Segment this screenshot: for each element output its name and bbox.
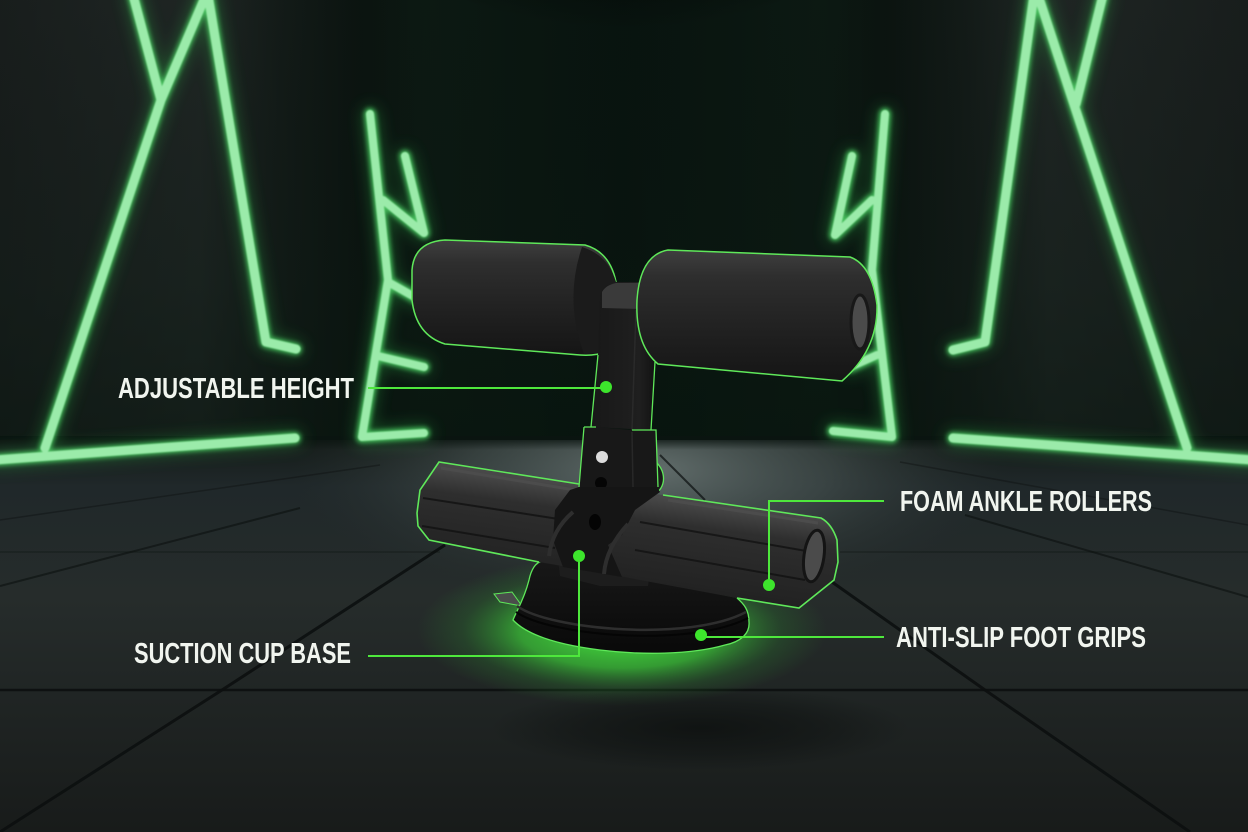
upright post: [591, 282, 660, 430]
rear knob: [650, 458, 664, 494]
callout: anti-slip foot grips: [695, 622, 1146, 654]
upper left pad: [412, 240, 616, 355]
neon wall lines: left: [0, 0, 424, 460]
callout: adjustable height: ADJUSTABLE HEIGHT: [118, 373, 354, 405]
base collar: [558, 560, 650, 586]
callout: suction cup base: [134, 550, 585, 670]
suction cup base: [494, 560, 749, 653]
callout: adjustable height: [118, 373, 612, 405]
floor glow under product: [417, 554, 827, 706]
callout: foam ankle rollers: FOAM ANKLE ROLLERS: [900, 486, 1152, 518]
background: floor with tile seams: [0, 436, 1248, 832]
callout: anti-slip foot grips: ANTI-SLIP FOOT GRIPS: [896, 622, 1146, 654]
callout: suction cup base: SUCTION CUP BASE: [134, 638, 351, 670]
floor shadow: [490, 686, 910, 770]
neon wall lines: right: [833, 0, 1248, 460]
upper right pad: [637, 250, 877, 381]
product: sit-up assistant: [412, 240, 877, 653]
background: room walls: [0, 0, 1248, 470]
roller bracket: [549, 487, 660, 577]
lower foam ankle roller: [417, 462, 838, 608]
height sleeve: [579, 427, 658, 492]
callout: foam ankle rollers: [763, 486, 1152, 591]
